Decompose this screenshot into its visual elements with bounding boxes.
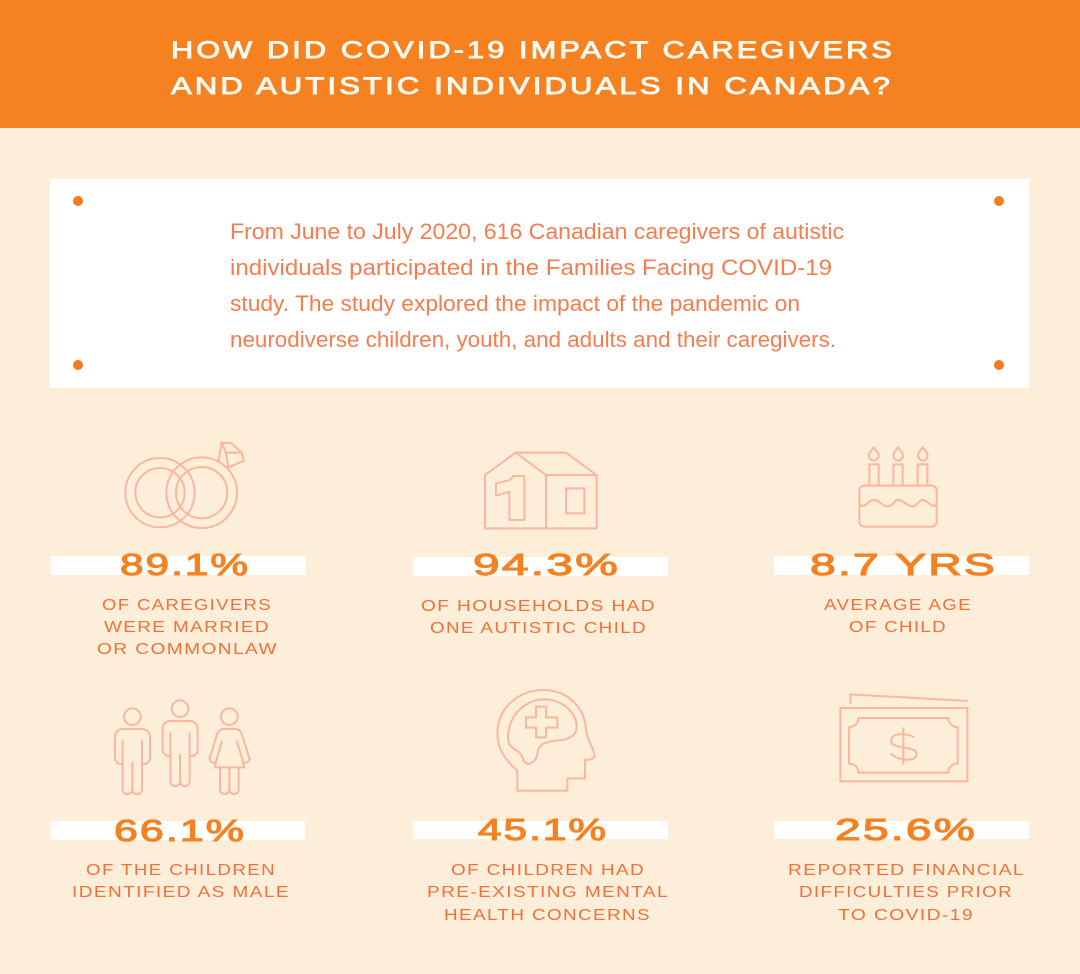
label: pre-existing mental health concerns: OF CHILDREN HAD — [451, 862, 645, 879]
stat: marital status — [51, 443, 306, 658]
icon: wedding rings — [125, 443, 244, 528]
icon: three people — [115, 700, 250, 794]
intro text: individuals participated in the Families Facing COVID-19 — [230, 255, 832, 280]
label: average age of child: OF CHILD — [849, 619, 947, 636]
label: married or commonlaw: WERE MARRIED — [104, 619, 270, 636]
intro text: study. The study explored the impact of the pandemic on — [230, 291, 800, 316]
icon: house with one and zero — [485, 453, 597, 528]
panel: study introduction — [50, 179, 1029, 388]
stat: households: 94.3% — [473, 547, 620, 582]
label: one autistic child: OF HOUSEHOLDS HAD — [421, 598, 656, 615]
stat: gender — [51, 700, 305, 901]
intro text: From June to July 2020, 616 Canadian caregivers of autistic — [230, 219, 844, 244]
label: financial difficulties prior to covid-19: REPORTED FINANCIAL — [788, 862, 1025, 879]
label: identified as male — [72, 862, 290, 901]
intro text — [230, 219, 844, 352]
icon: banknotes — [840, 694, 968, 781]
stat: households — [413, 453, 668, 637]
label: average age of child: AVERAGE AGE — [824, 597, 972, 614]
label: financial difficulties prior to covid-19: DIFFICULTIES PRIOR — [799, 884, 1013, 901]
icon: head with medical cross — [497, 690, 595, 791]
label: pre-existing mental health concerns: HEALTH CONCERNS — [444, 907, 651, 924]
label: married or commonlaw: OF CAREGIVERS — [102, 597, 272, 614]
stat: financial difficulties — [774, 694, 1029, 924]
label: one autistic child: ONE AUTISTIC CHILD — [430, 620, 647, 637]
title: AND AUTISTIC INDIVIDUALS IN CANADA? — [171, 73, 893, 100]
label: married or commonlaw — [97, 597, 278, 658]
stat: mental health — [413, 690, 669, 924]
stat: financial difficulties: 25.6% — [835, 812, 977, 847]
label: pre-existing mental health concerns — [427, 862, 669, 924]
label: pre-existing mental health concerns: PRE-EXISTING MENTAL — [427, 884, 669, 901]
label: identified as male: IDENTIFIED AS MALE — [72, 884, 290, 901]
label: identified as male: OF THE CHILDREN — [86, 862, 276, 879]
intro text: neurodiverse children, youth, and adults and their caregivers. — [230, 327, 836, 352]
label: financial difficulties prior to covid-19: TO COVID-19 — [838, 907, 974, 924]
label: one autistic child — [421, 598, 656, 637]
icon: birthday cake — [859, 447, 937, 527]
stat: gender: 66.1% — [114, 813, 246, 848]
label: financial difficulties prior to covid-19 — [788, 862, 1025, 924]
stat: average age: 8.7 YRS — [810, 547, 997, 582]
label: married or commonlaw: OR COMMONLAW — [97, 641, 278, 658]
stat: average age — [774, 447, 1029, 636]
stat: mental health: 45.1% — [478, 812, 608, 847]
header banner — [0, 0, 1080, 128]
title — [171, 37, 895, 100]
label: average age of child — [824, 597, 972, 636]
stat: marital status: 89.1% — [120, 547, 250, 582]
title: HOW DID COVID-19 IMPACT CAREGIVERS — [171, 37, 895, 64]
